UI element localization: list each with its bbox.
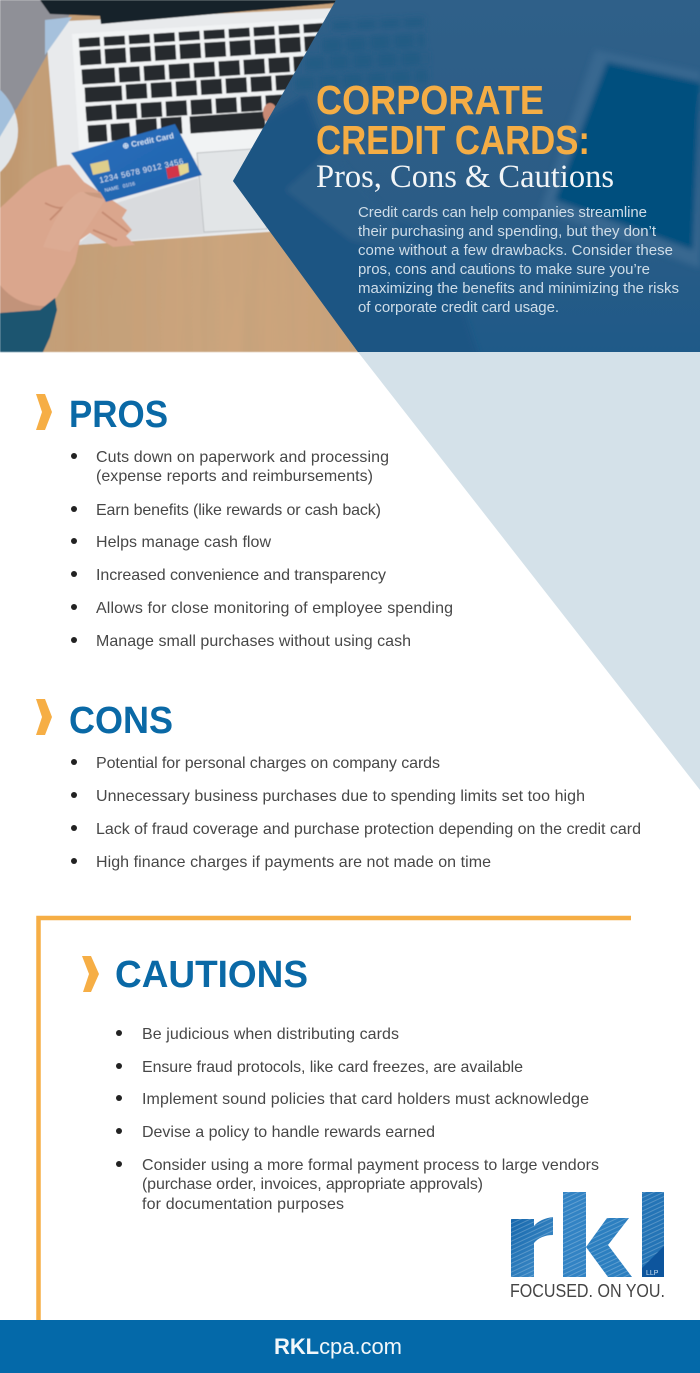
letter k — [563, 1192, 632, 1277]
cautions list: Consider using a more formal payment process to large vendors — [142, 1157, 599, 1174]
laptop body — [45, 8, 340, 245]
icon: cons chevron — [36, 699, 52, 735]
credit card — [71, 124, 202, 202]
cons list: Lack of fraud coverage and purchase protection depending on the credit card — [96, 821, 641, 838]
pale blue corner — [45, 17, 72, 55]
pros list — [71, 449, 453, 650]
laptop screen hinge — [40, 0, 340, 24]
pros list: Manage small purchases without using cash — [96, 633, 411, 650]
icon: cautions chevron — [82, 956, 99, 992]
intro paragraph: come without a few drawbacks. Consider these — [358, 242, 673, 259]
pros list: (expense reports and reimbursements) — [96, 468, 373, 485]
cautions list: for documentation purposes — [142, 1196, 344, 1213]
intro paragraph: maximizing the benefits and minimizing the risks — [358, 280, 679, 297]
finger shadows — [45, 203, 128, 240]
cautions list — [116, 1026, 599, 1213]
letter r — [511, 1217, 553, 1277]
cons section — [36, 699, 641, 871]
panel frame — [38, 918, 631, 1320]
pros list: Earn benefits (like rewards or cash back) — [96, 502, 381, 519]
header photo: laptop and credit card on wood desk — [0, 0, 358, 353]
cautions heading: CAUTIONS — [115, 954, 308, 996]
credit card: NAME 01/16 — [104, 181, 136, 194]
pros list: Cuts down on paperwork and processing — [96, 449, 389, 466]
fingertip at keyboard — [263, 103, 277, 123]
cons list: High finance charges if payments are not made on time — [96, 854, 491, 871]
title: CORPORATE — [316, 77, 544, 123]
header dark blue hexagon — [225, 0, 700, 360]
thumb over card — [43, 192, 105, 252]
subtitle: Pros, Cons & Cautions — [316, 159, 614, 195]
mug — [0, 89, 19, 173]
intro paragraph: Credit cards can help companies streamline — [358, 204, 647, 221]
hand — [0, 165, 135, 313]
pros heading: PROS — [69, 394, 168, 436]
overlay tablet — [540, 50, 700, 268]
pros list: Increased convenience and transparency — [96, 567, 386, 584]
letter l: LLP — [646, 1270, 659, 1277]
pale blue triangle background — [358, 352, 700, 790]
palm rest — [77, 178, 250, 245]
cautions panel — [38, 918, 631, 1320]
credit card: 1234 5678 9012 3456 — [98, 157, 185, 185]
title: CREDIT CARDS: — [316, 117, 590, 163]
title — [316, 77, 590, 163]
intro paragraph: pros, cons and cautions to make sure you’re — [358, 261, 650, 278]
sleeve — [0, 298, 57, 352]
pros section — [36, 394, 453, 650]
keyboard rows — [79, 27, 330, 134]
intro paragraph — [358, 204, 679, 316]
cons heading: CONS — [69, 700, 173, 742]
overlay keyboard — [295, 22, 428, 84]
icon: pros chevron — [36, 394, 52, 430]
logo tagline: FOCUSED. ON YOU. — [510, 1281, 665, 1301]
overlay arm — [233, 96, 456, 352]
cautions list: Ensure fraud protocols, like card freezes, are available — [142, 1059, 523, 1076]
cautions list: Devise a policy to handle rewards earned — [142, 1124, 435, 1141]
cautions list: Be judicious when distributing cards — [142, 1026, 399, 1043]
cons list — [71, 755, 641, 871]
footer bar — [0, 1320, 700, 1373]
cons list: Unnecessary business purchases due to spending limits set too high — [96, 788, 585, 805]
RKL logo — [510, 1192, 665, 1301]
letter l — [642, 1192, 664, 1277]
cautions list: Implement sound policies that card holders must acknowledge — [142, 1091, 589, 1108]
intro paragraph: their purchasing and spending, but they don’t — [358, 223, 657, 240]
cons list: Potential for personal charges on company cards — [96, 755, 440, 772]
cautions list: (purchase order, invoices, appropriate approvals) — [142, 1176, 483, 1193]
pros list: Helps manage cash flow — [96, 534, 271, 551]
credit card: ⊕ Credit Card — [122, 131, 175, 151]
trackpad — [197, 149, 267, 232]
pros list: Allows for close monitoring of employee spending — [96, 600, 453, 617]
intro paragraph: of corporate credit card usage. — [358, 299, 559, 316]
website: RKLcpa.com — [274, 1334, 402, 1359]
wood desk — [0, 0, 420, 352]
grey top-left overlay — [0, 0, 78, 130]
